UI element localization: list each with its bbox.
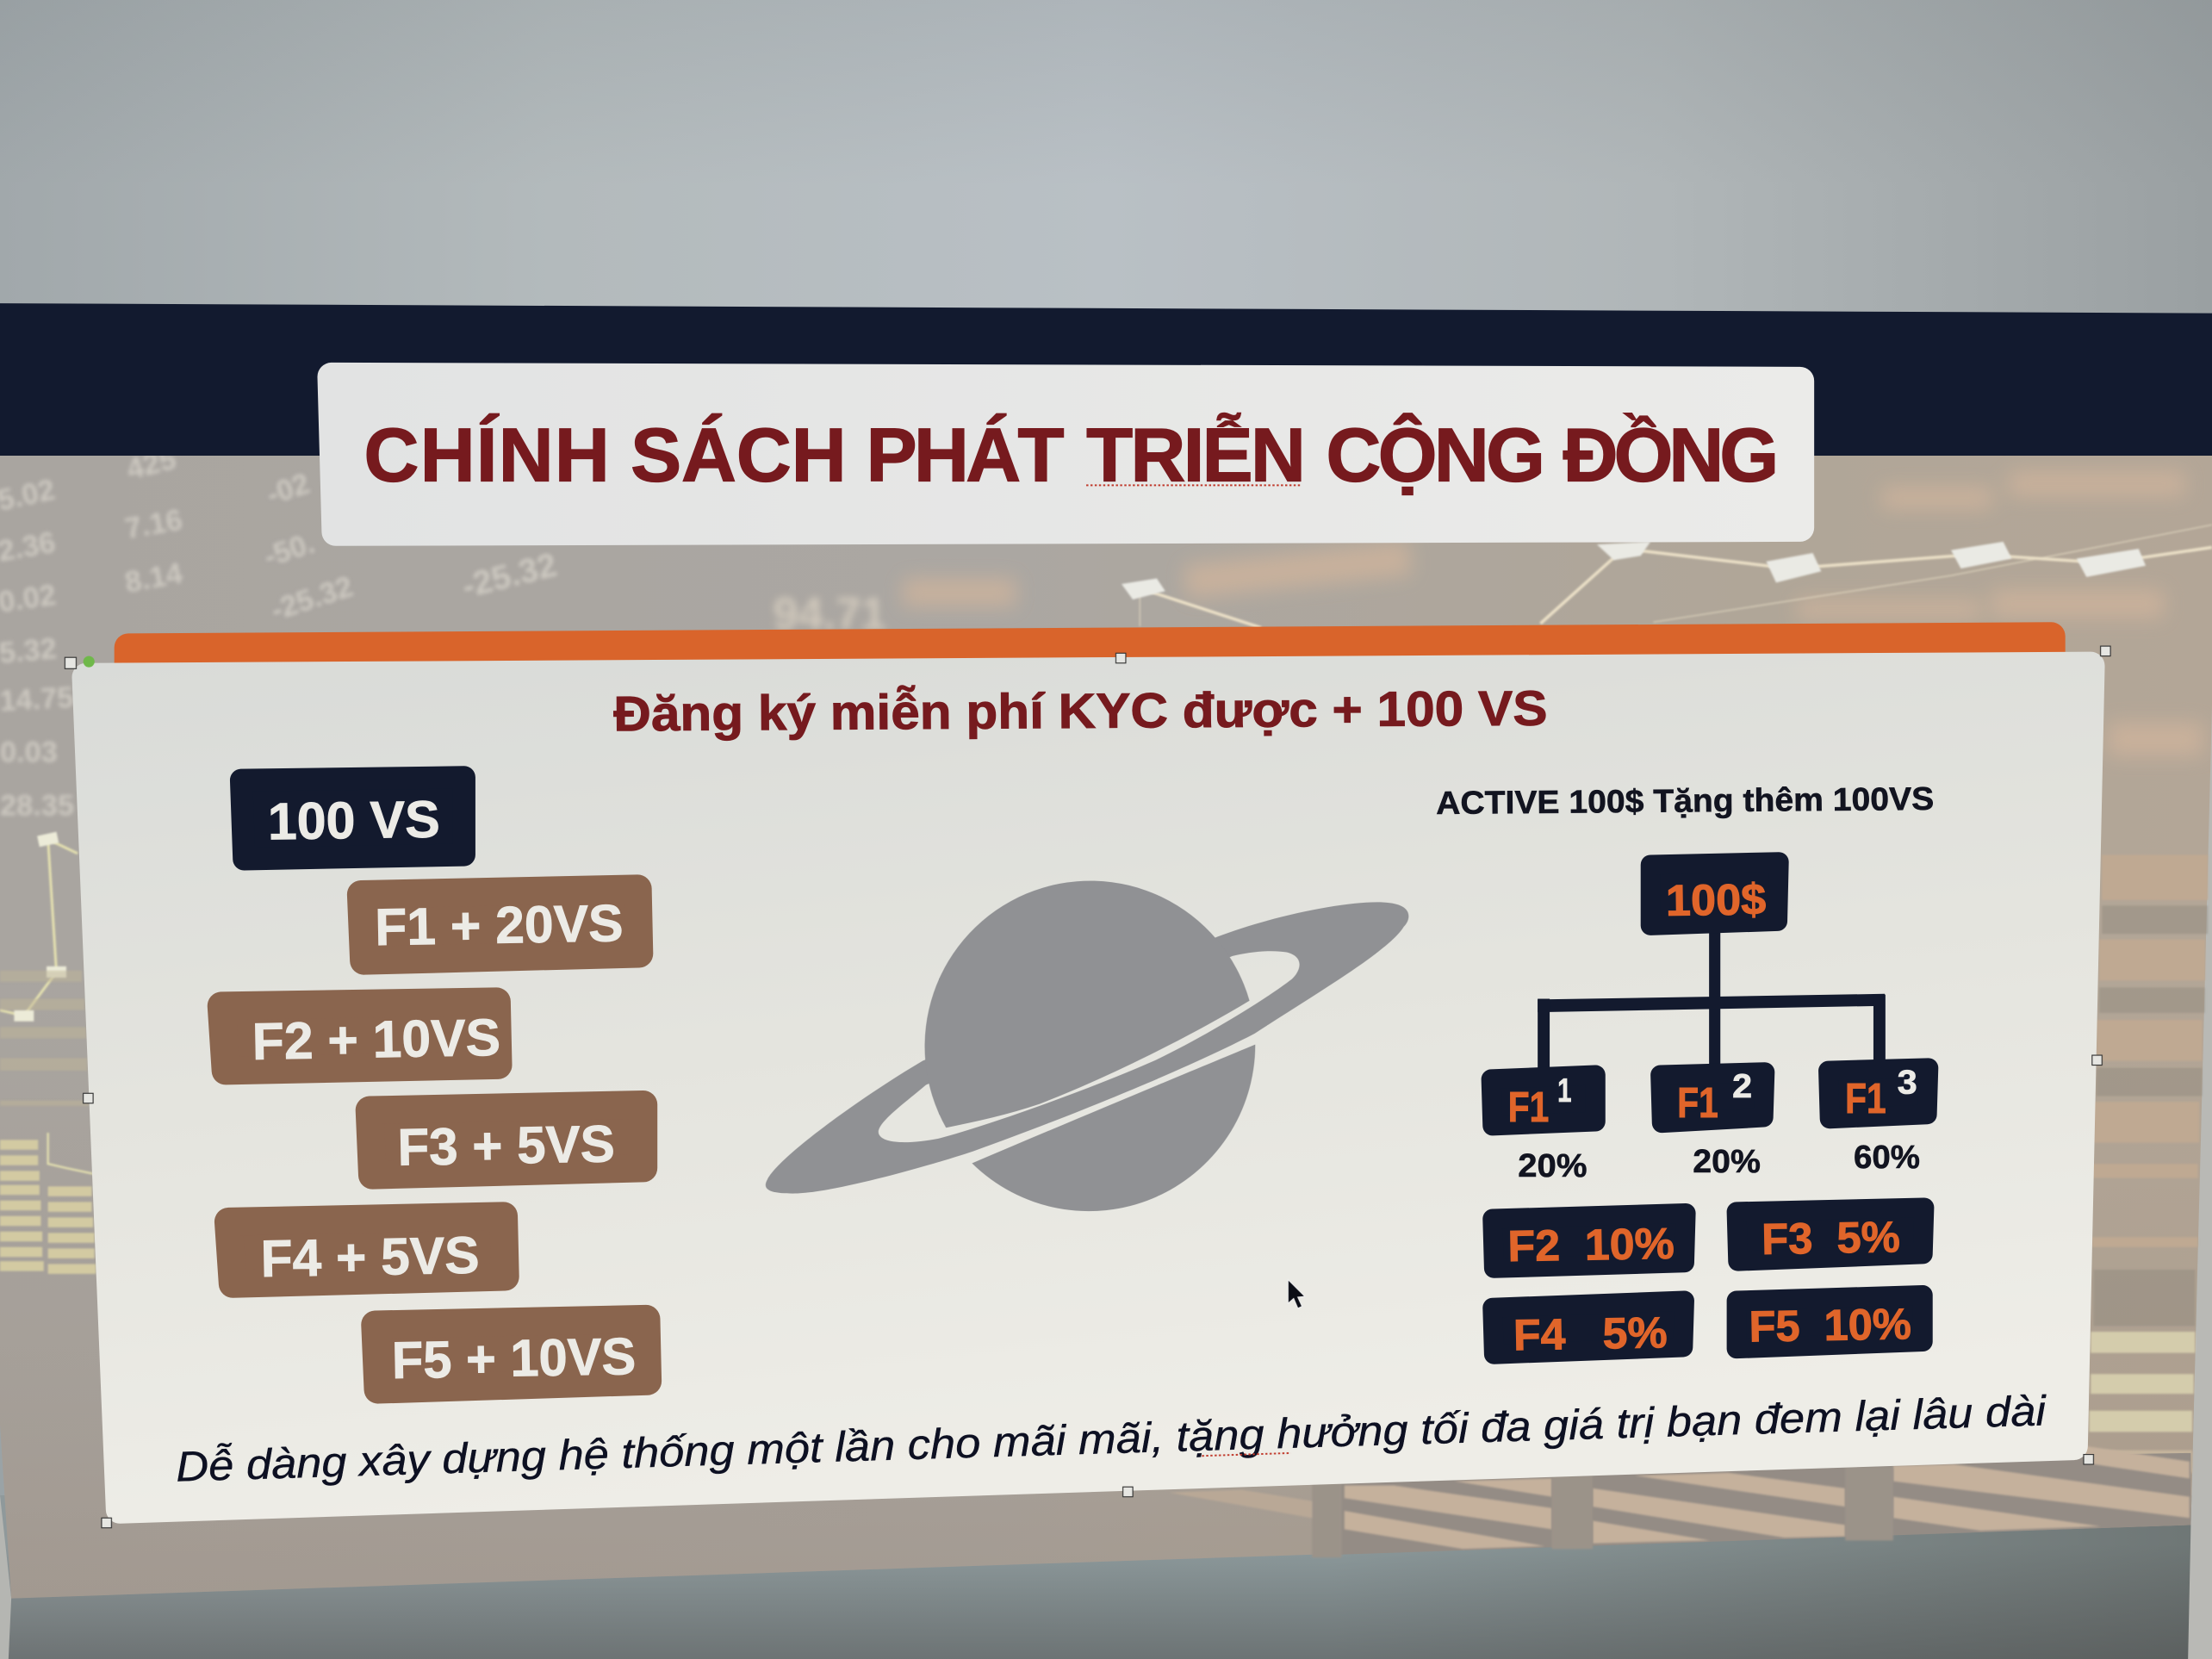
slide background with trading chart photo [0, 443, 2212, 1599]
left ladder of rewards [221, 777, 648, 1389]
tree connectors [1538, 931, 1886, 1069]
commission level boxes [1493, 1208, 1924, 1359]
title: TRIỄN [1086, 412, 1303, 497]
background ticker numbers: 28.35 [0, 790, 74, 823]
box: F1 3: 3 [1898, 1063, 1917, 1101]
box: F4 + 5VS [228, 1216, 505, 1288]
box: 100 VS: 100 VS [267, 790, 440, 850]
screen area below slide [0, 1495, 2212, 1659]
box: F1 3: F1 [1845, 1076, 1886, 1122]
background blurred figure: 94.71 [773, 589, 886, 639]
background ticker numbers: -50. [260, 527, 319, 574]
background ticker numbers: 425 [123, 443, 179, 487]
background left chart line [0, 839, 93, 1174]
background ticker numbers: 8.14 [122, 557, 185, 600]
box: F3 5% [1737, 1208, 1924, 1264]
monitor edge strip [2188, 677, 2212, 1659]
share: 20%: 20% [1518, 1147, 1587, 1184]
background ticker numbers: -02 [263, 467, 314, 512]
spellcheck underline [1202, 1453, 1291, 1456]
box: F1 2: 2 [1732, 1067, 1752, 1105]
background bottom stripes [1170, 1446, 2190, 1557]
main white panel [86, 666, 2091, 1509]
box: F4 5%: F4 5% [1513, 1308, 1668, 1359]
background ticker numbers: -25.32 [458, 545, 561, 606]
box: F1 1: F1 [1508, 1084, 1549, 1131]
box: F1 1 [1491, 1072, 1595, 1131]
right heading: ACTIVE 100$ Tặng thêm 100VS [1436, 780, 1934, 821]
box: F2 + 10VS: F2 + 10VS [252, 1008, 501, 1071]
box: 100$ [1650, 862, 1779, 925]
background left chart nodes [14, 832, 66, 1022]
spellcheck underline [1086, 484, 1302, 486]
background left faint bands [0, 971, 89, 1106]
background ticker numbers [0, 443, 561, 823]
title: CHÍNH [364, 412, 611, 497]
title: ĐỒNG [1563, 412, 1774, 497]
share: 20% second: 20% [1693, 1143, 1761, 1179]
background ticker numbers: -25.32 [267, 570, 357, 627]
box: F1 1: 1 [1557, 1072, 1571, 1109]
panel heading: Đăng ký miễn phí KYC được + 100 VS [613, 681, 1548, 742]
mouse cursor [1288, 1279, 1305, 1308]
background ticker numbers: 7.16 [122, 503, 185, 546]
box: F5 10%: F5 10% [1749, 1299, 1911, 1351]
title: SÁCH [631, 412, 847, 497]
background top-right chart line [1140, 525, 2212, 628]
green rotation handle [84, 656, 95, 668]
monitor edge strip left [0, 1495, 11, 1659]
background ticker numbers: 14.75 [0, 681, 74, 718]
box: F4 + 5VS: F4 + 5VS [260, 1226, 480, 1288]
box: F3 + 5VS [370, 1104, 643, 1177]
box: F2 10%: F2 10% [1507, 1219, 1675, 1271]
box: 100$: 100$ [1666, 874, 1767, 925]
box: F1 2 [1661, 1067, 1765, 1127]
box: F1 2: F1 [1677, 1080, 1718, 1127]
background right stripes [2090, 854, 2208, 1473]
footer tagline: Dễ dàng xây dựng hệ thống một lần cho mãi mãi, tặng hưởng tối đa giá trị bạn đem lại lâu dài [175, 1387, 2048, 1491]
commission tree [1491, 862, 1929, 1184]
title: PHÁT [867, 412, 1064, 497]
box: 100 VS [241, 777, 464, 859]
background ticker numbers: 0.03 [0, 736, 58, 768]
box: F5 + 10VS: F5 + 10VS [391, 1327, 637, 1389]
box: F1 3 [1829, 1063, 1929, 1122]
box: F3 5%: F3 5% [1762, 1212, 1900, 1264]
share: 60%: 60% [1854, 1139, 1920, 1175]
icon: ringed planet [766, 881, 1408, 1211]
title card [332, 376, 1800, 531]
background left stripes [0, 1140, 96, 1274]
box: F3 + 5VS: F3 + 5VS [397, 1114, 615, 1177]
title: CỘNG [1326, 412, 1542, 497]
orange panel header strip [128, 637, 2051, 670]
background chart nodes [1122, 542, 2146, 600]
box: F1 + 20VS: F1 + 20VS [375, 893, 624, 956]
dark header bar [0, 303, 2212, 456]
screen area above slide [0, 0, 2212, 339]
selection handles [65, 646, 2110, 1528]
box: F4 5% [1493, 1301, 1684, 1359]
background glows [903, 471, 2203, 756]
